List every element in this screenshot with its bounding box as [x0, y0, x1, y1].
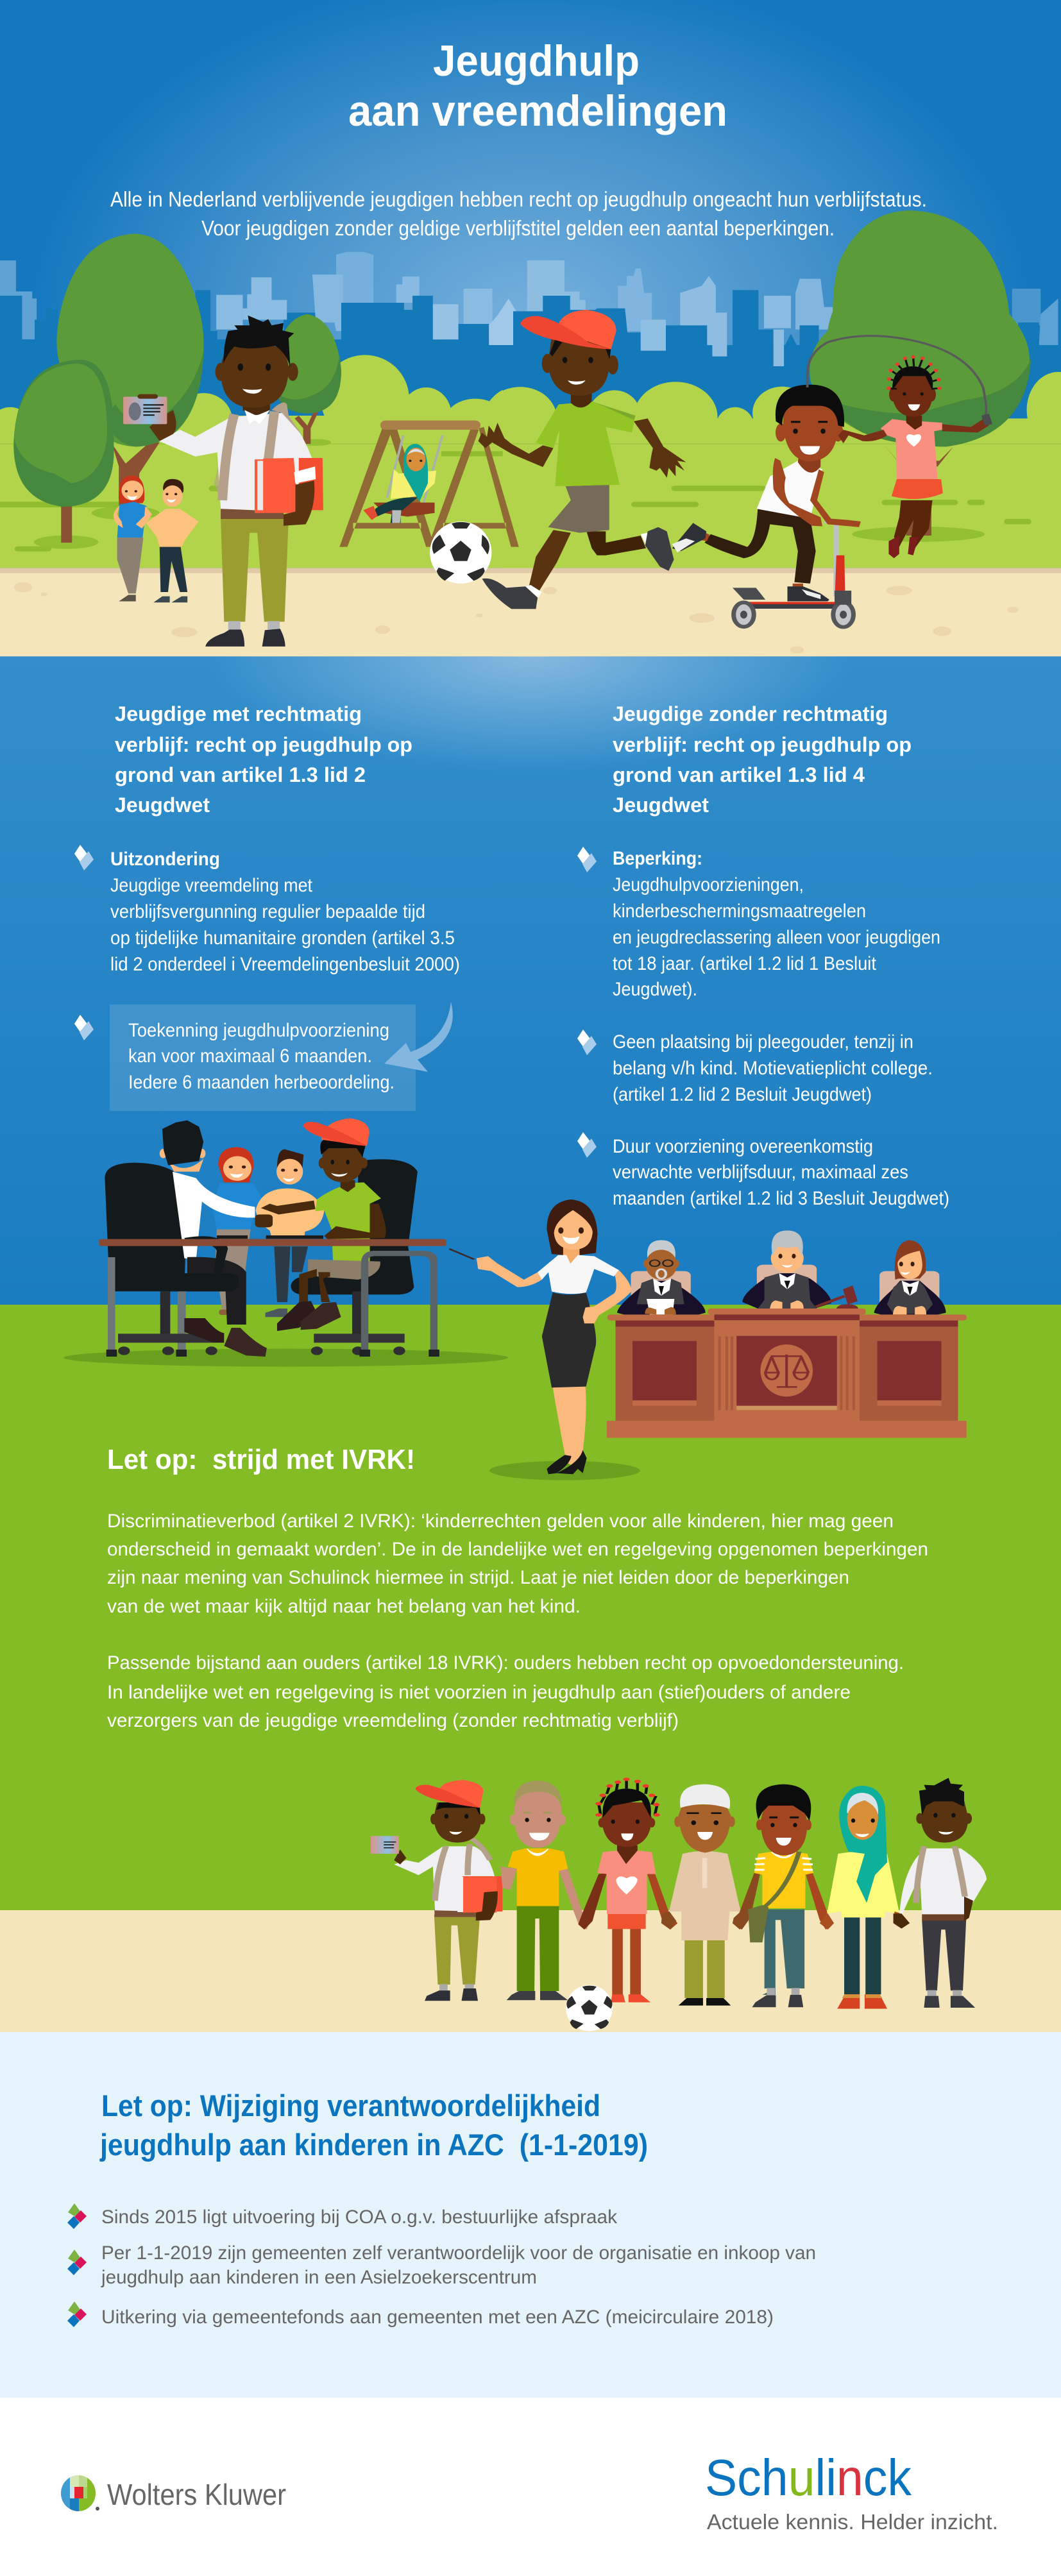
text: IVRK paragraphs: verzorgers van de jeugdige vreemdeling (zonder rechtmatig verblijf)	[107, 1710, 679, 1731]
text: bullet 3: Uitkering via gemeentefonds aan gemeenten met een AZC (meicirculaire 2018)	[101, 2307, 774, 2328]
icon: bullet diamond 2	[74, 1015, 94, 1040]
two small figures: woman and boy	[114, 475, 199, 602]
text: bullet 2	[101, 2242, 816, 2288]
person 1: boy with cap and ID	[371, 1780, 502, 2001]
text: IVRK paragraphs	[107, 1511, 928, 1731]
title: Jeugdhulp	[433, 37, 640, 85]
text: Beperking: Jeugdwet).	[613, 979, 697, 1000]
text: IVRK paragraphs: onderscheid in gemaakt worden’. De in de landelijke wet en regelgeving opgenomen beperkingen	[107, 1539, 928, 1560]
heading: without lawful residence: grond van artikel 1.3 lid 4	[613, 763, 865, 786]
icon: bullet diamond 3	[577, 847, 597, 872]
heading: Wijziging verantwoordelijkheid: Let op: Wijziging verantwoordelijkheid	[101, 2089, 600, 2123]
logo: Schulinck with tagline: Schulinck	[705, 2449, 912, 2506]
heading: with lawful residence	[115, 702, 412, 817]
person 5: boy with yellow shirt and satchel	[733, 1784, 834, 2007]
teacher with pointer	[449, 1199, 640, 1480]
person 2: boy in yellow shirt	[500, 1781, 590, 2000]
heading: without lawful residence	[613, 702, 912, 817]
icon: bullet diamond 5	[577, 1132, 597, 1158]
text: geen plaatsing: Geen plaatsing bij pleegouder, tenzij in	[613, 1031, 913, 1053]
text: Beperking: tot 18 jaar. (artikel 1.2 lid 1 Besluit	[613, 953, 877, 974]
icon: bullet diamond 1	[74, 845, 94, 870]
text: bullet 2: Per 1-1-2019 zijn gemeenten zelf verantwoordelijk voor de organisatie en inkoop van	[101, 2242, 816, 2264]
text: Uitzondering: lid 2 onderdeel i Vreemdelingenbesluit 2000)	[110, 954, 460, 975]
heading: Wijziging verantwoordelijkheid	[99, 2089, 648, 2162]
text: Uitzondering: verblijfsvergunning regulier bepaalde tijd	[110, 901, 425, 922]
heading: without lawful residence: Jeugdige zonder rechtmatig	[613, 702, 888, 725]
logo: Schulinck with tagline	[705, 2449, 998, 2534]
boy on scooter	[672, 385, 861, 627]
girl with jump rope	[808, 336, 992, 558]
text: geen plaatsing: (artikel 1.2 lid 2 Besluit Jeugdwet)	[613, 1084, 872, 1105]
text: duur voorziening	[613, 1136, 949, 1209]
text: Uitzondering	[110, 849, 460, 975]
text: bullet 1: Sinds 2015 ligt uitvoering bij COA o.g.v. bestuurlijke afspraak	[101, 2207, 618, 2228]
intro text: Voor jeugdigen zonder geldige verblijfstitel gelden een aantal beperkingen.	[201, 216, 835, 240]
man with ID card, backpack and folder	[123, 316, 323, 647]
text: IVRK paragraphs: zijn naar mening van Schulinck hiermee in strijd. Laat je niet leiden door de beperkingen	[107, 1567, 849, 1588]
text: duur voorziening: maanden (artikel 1.2 lid 3 Besluit Jeugdwet)	[613, 1188, 949, 1209]
soccer ball, hero	[430, 521, 491, 584]
group of seven young people holding hands	[371, 1777, 987, 2009]
heading: with lawful residence: Jeugdwet	[115, 793, 210, 817]
judges bench with three judges	[607, 1230, 967, 1438]
text: Uitzondering: Uitzondering	[110, 849, 220, 870]
icon: coloured bullet 3	[67, 2301, 87, 2327]
text: Beperking	[613, 848, 940, 1000]
text: Beperking: en jeugdreclassering alleen voor jeugdigen	[613, 927, 940, 948]
logo: Wolters Kluwer	[61, 2475, 286, 2511]
logo: Schulinck with tagline: Actuele kennis. Helder inzicht.	[707, 2510, 998, 2534]
text: IVRK paragraphs: van de wet maar kijk altijd naar het belang van het kind.	[107, 1596, 581, 1617]
heading: without lawful residence: verblijf: recht op jeugdhulp op	[613, 733, 912, 756]
text: geen plaatsing: belang v/h kind. Motievatieplicht college.	[613, 1058, 933, 1079]
intro text: Alle in Nederland verblijvende jeugdigen hebben recht op jeugdhulp ongeacht hun verblijfstatus.	[110, 187, 927, 211]
callout: toekenning box: Iedere 6 maanden herbeoordeling.	[128, 1072, 395, 1093]
person 3: girl with beads	[578, 1777, 677, 2003]
callout: toekenning box	[110, 1004, 416, 1111]
logo: Wolters Kluwer: Wolters Kluwer	[107, 2478, 286, 2511]
arrow: curved callout arrow	[384, 1002, 453, 1072]
icon: coloured bullet 2	[67, 2250, 87, 2275]
park scenery left: skyline, bushes, trees, grass, path	[0, 233, 554, 656]
heading: with lawful residence: Jeugdige met rechtmatig	[115, 702, 362, 725]
heading: with lawful residence: grond van artikel 1.3 lid 2	[115, 763, 366, 786]
callout: toekenning box: kan voor maximaal 6 maanden.	[128, 1046, 372, 1067]
title	[348, 37, 727, 135]
text: IVRK paragraphs: Passende bijstand aan ouders (artikel 18 IVRK): ouders hebben recht op opvoedondersteuning.	[107, 1652, 904, 1674]
soccer ball, bottom	[566, 1985, 613, 2031]
text: Beperking: Jeugdhulpvoorzieningen,	[613, 874, 804, 895]
runner with red cap	[479, 310, 686, 609]
text: duur voorziening: verwachte verblijfsduur, maximaal zes	[613, 1162, 908, 1183]
park scenery right: skyline, bushes, tree, grass, path	[484, 210, 1061, 656]
person 7: boy with backpack	[894, 1778, 987, 2008]
intro text	[110, 187, 927, 240]
icon: bullet diamond 4	[577, 1030, 597, 1055]
text: Uitzondering: op tijdelijke humanitaire gronden (artikel 3.5	[110, 928, 455, 949]
icon: coloured bullet 1	[67, 2203, 87, 2229]
person 4: boy with kufi and robe	[661, 1784, 747, 2006]
person 6: girl in hijab	[820, 1786, 910, 2009]
text: bullet 2: jeugdhulp aan kinderen in een Asielzoekerscentrum	[101, 2267, 537, 2288]
heading: Let op strijd met IVRK: Let op: strijd met IVRK!	[107, 1444, 415, 1475]
text: duur voorziening: Duur voorziening overeenkomstig	[613, 1136, 873, 1157]
text: IVRK paragraphs: In landelijke wet en regelgeving is niet voorzien in jeugdhulp aan (stief)ouders of andere	[107, 1682, 851, 1703]
text: geen plaatsing	[613, 1031, 933, 1105]
meeting scene at table	[64, 1118, 508, 1367]
heading: Wijziging verantwoordelijkheid: jeugdhulp aan kinderen in AZC (1-1-2019)	[99, 2128, 648, 2162]
title: aan vreemdelingen	[348, 87, 727, 135]
heading: with lawful residence: verblijf: recht op jeugdhulp op	[115, 733, 412, 756]
heading: without lawful residence: Jeugdwet	[613, 793, 709, 817]
text: Beperking: Beperking:	[613, 848, 702, 869]
swing with child	[339, 420, 519, 547]
callout: toekenning box: Toekenning jeugdhulpvoorziening	[128, 1020, 389, 1041]
text: Uitzondering: Jeugdige vreemdeling met	[110, 875, 313, 896]
text: Beperking: kinderbeschermingsmaatregelen	[613, 901, 866, 922]
text: IVRK paragraphs: Discriminatieverbod (artikel 2 IVRK): ‘kinderrechten gelden voor alle kinderen, hier mag geen	[107, 1511, 894, 1532]
